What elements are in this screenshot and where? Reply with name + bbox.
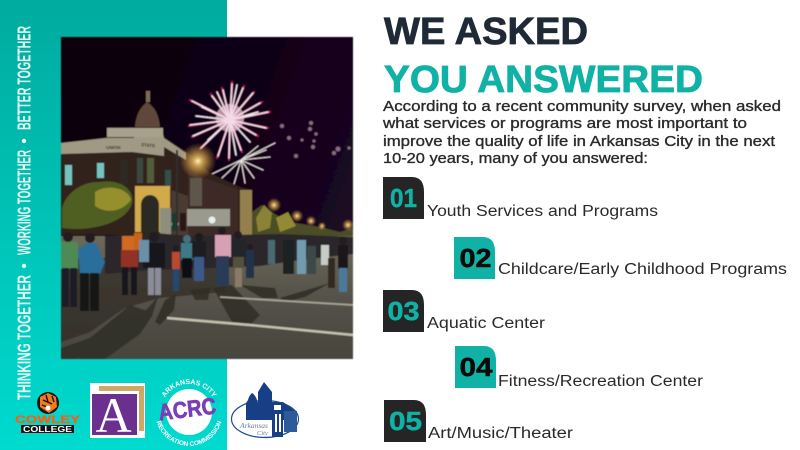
distant trees and lights bbox=[252, 205, 353, 242]
firework: fading smoke sparks bbox=[280, 121, 351, 158]
logo: ACRC recreation commission bbox=[156, 379, 222, 446]
firework: lower burst bbox=[212, 143, 275, 184]
logo: Arkansas City: Arkansas bbox=[239, 421, 268, 430]
curved caption top: ARKANSAS CITY bbox=[162, 379, 217, 398]
building: Union State Bank bbox=[61, 91, 252, 236]
photo sky bbox=[61, 37, 353, 359]
heading: You Answered: YOU ANSWERED bbox=[384, 59, 703, 101]
list item 03 bbox=[383, 290, 545, 332]
person: teal jacket bbox=[181, 235, 193, 278]
intro paragraph: 10-20 years, many of you answered: bbox=[383, 150, 648, 167]
list item 02: 02 bbox=[460, 243, 492, 273]
list item 03: Aquatic Center bbox=[427, 315, 545, 332]
person: black top bbox=[143, 232, 165, 295]
people: background right group bbox=[268, 240, 329, 274]
intro paragraph bbox=[382, 98, 781, 167]
building: Union State Bank: STATE bbox=[141, 142, 155, 148]
person: couple bbox=[246, 244, 254, 278]
list item 04 bbox=[455, 346, 703, 390]
building dome bbox=[135, 102, 160, 127]
person: pink shirt bbox=[215, 227, 231, 286]
curved caption bottom: RECREATION COMMISSION bbox=[156, 420, 222, 446]
building windows bbox=[65, 165, 72, 185]
traffic signal bbox=[172, 213, 178, 231]
intro paragraph: what services or programs are most important to bbox=[382, 115, 747, 132]
list item 04: Fitness/Recreation Center bbox=[498, 373, 703, 390]
list item 01 bbox=[383, 177, 658, 220]
person: red hoodie bbox=[121, 240, 138, 295]
people: orange and cyan bbox=[122, 233, 149, 262]
list item 05 bbox=[384, 400, 573, 442]
Cowley wordmark: COWLEY bbox=[15, 414, 81, 426]
road dark zone under crowd bbox=[61, 258, 225, 342]
photo: downtown street with fireworks bbox=[61, 37, 354, 359]
list item 05: 05 bbox=[389, 406, 422, 436]
crowd in background bbox=[105, 233, 353, 274]
logo: Arkansas City bbox=[232, 382, 298, 438]
list item 01: 01 bbox=[390, 183, 417, 213]
intro paragraph: improve the quality of life in Arkansas City in the next bbox=[383, 133, 776, 150]
building sign text: UNION bbox=[106, 145, 120, 150]
logo: purple A bbox=[90, 383, 145, 443]
building cornice bbox=[61, 130, 186, 160]
road lane marking bbox=[167, 318, 353, 335]
logo: Cowley College bbox=[15, 392, 81, 434]
road shadows bbox=[61, 283, 330, 359]
building lit corner bbox=[135, 186, 170, 232]
sidebar vertical slogan bbox=[14, 26, 34, 400]
person: right woman bbox=[338, 237, 348, 292]
list item 03: 03 bbox=[388, 296, 420, 326]
person: dark jacket bbox=[192, 233, 206, 281]
panel: teal sidebar bbox=[0, 0, 227, 450]
list item 02: Childcare/Early Childhood Programs bbox=[498, 261, 787, 278]
list item 05: Art/Music/Theater bbox=[428, 425, 573, 442]
tiger head icon bbox=[37, 392, 59, 414]
College wordmark bbox=[21, 425, 74, 433]
firework: pink burst bbox=[189, 82, 351, 184]
logo: Cowley College: COLLEGE bbox=[23, 425, 73, 434]
logo: Arkansas City: City bbox=[257, 430, 268, 437]
sidebar vertical slogan: WORKING TOGETHER bbox=[14, 150, 34, 255]
intro paragraph: According to a recent community survey, when asked bbox=[383, 98, 781, 115]
person: blue jacket bbox=[78, 233, 105, 311]
tree bbox=[62, 182, 132, 229]
sidebar vertical slogan: THINKING TOGETHER bbox=[14, 275, 34, 400]
logo: purple A: A bbox=[95, 387, 132, 443]
list item 02 bbox=[454, 237, 787, 279]
person: stroller man bbox=[328, 258, 335, 288]
person: dark shirt bbox=[231, 231, 246, 287]
person: child bbox=[172, 245, 180, 291]
heading: We Asked: WE ASKED bbox=[384, 11, 588, 53]
list item 04: 04 bbox=[460, 352, 493, 382]
list item 01: Youth Services and Programs bbox=[427, 203, 658, 220]
person: green jacket bbox=[61, 232, 78, 307]
road bbox=[61, 236, 353, 359]
crowd figures bbox=[61, 227, 348, 311]
ACRC wordmark: ACRC bbox=[157, 393, 217, 425]
